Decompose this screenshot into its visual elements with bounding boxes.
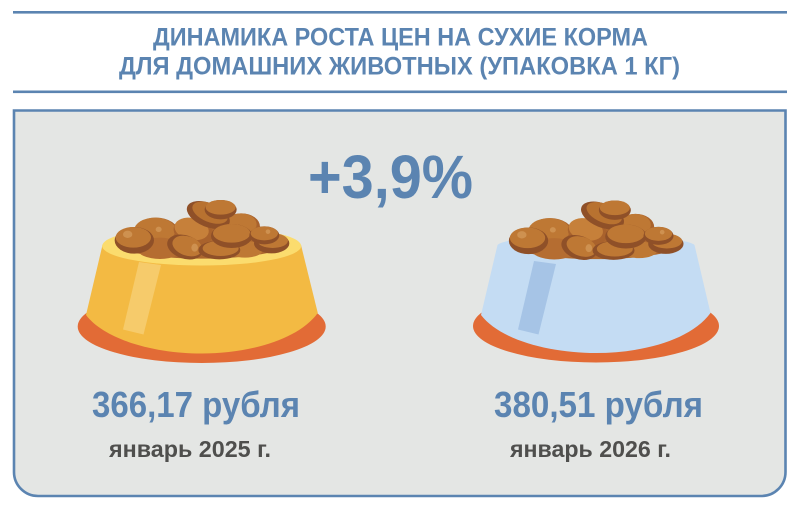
top rule <box>13 11 787 14</box>
price 2026: 380,51 рубля <box>494 384 703 425</box>
date 2025: январь 2025 г. <box>108 436 271 462</box>
title: ДЛЯ ДОМАШНИХ ЖИВОТНЫХ (УПАКОВКА 1 КГ) <box>119 52 680 80</box>
icon: blue bowl with food <box>473 196 719 362</box>
price 2025: 366,17 рубля <box>92 384 300 425</box>
growth percentage: +3,9% <box>308 143 473 211</box>
title: ДИНАМИКА РОСТА ЦЕН НА СУХИЕ КОРМА <box>153 24 648 52</box>
date 2026: январь 2026 г. <box>509 436 671 462</box>
main panel <box>14 110 786 496</box>
bottom title rule <box>13 90 787 93</box>
icon: yellow bowl with food <box>78 195 326 363</box>
title <box>119 24 680 80</box>
